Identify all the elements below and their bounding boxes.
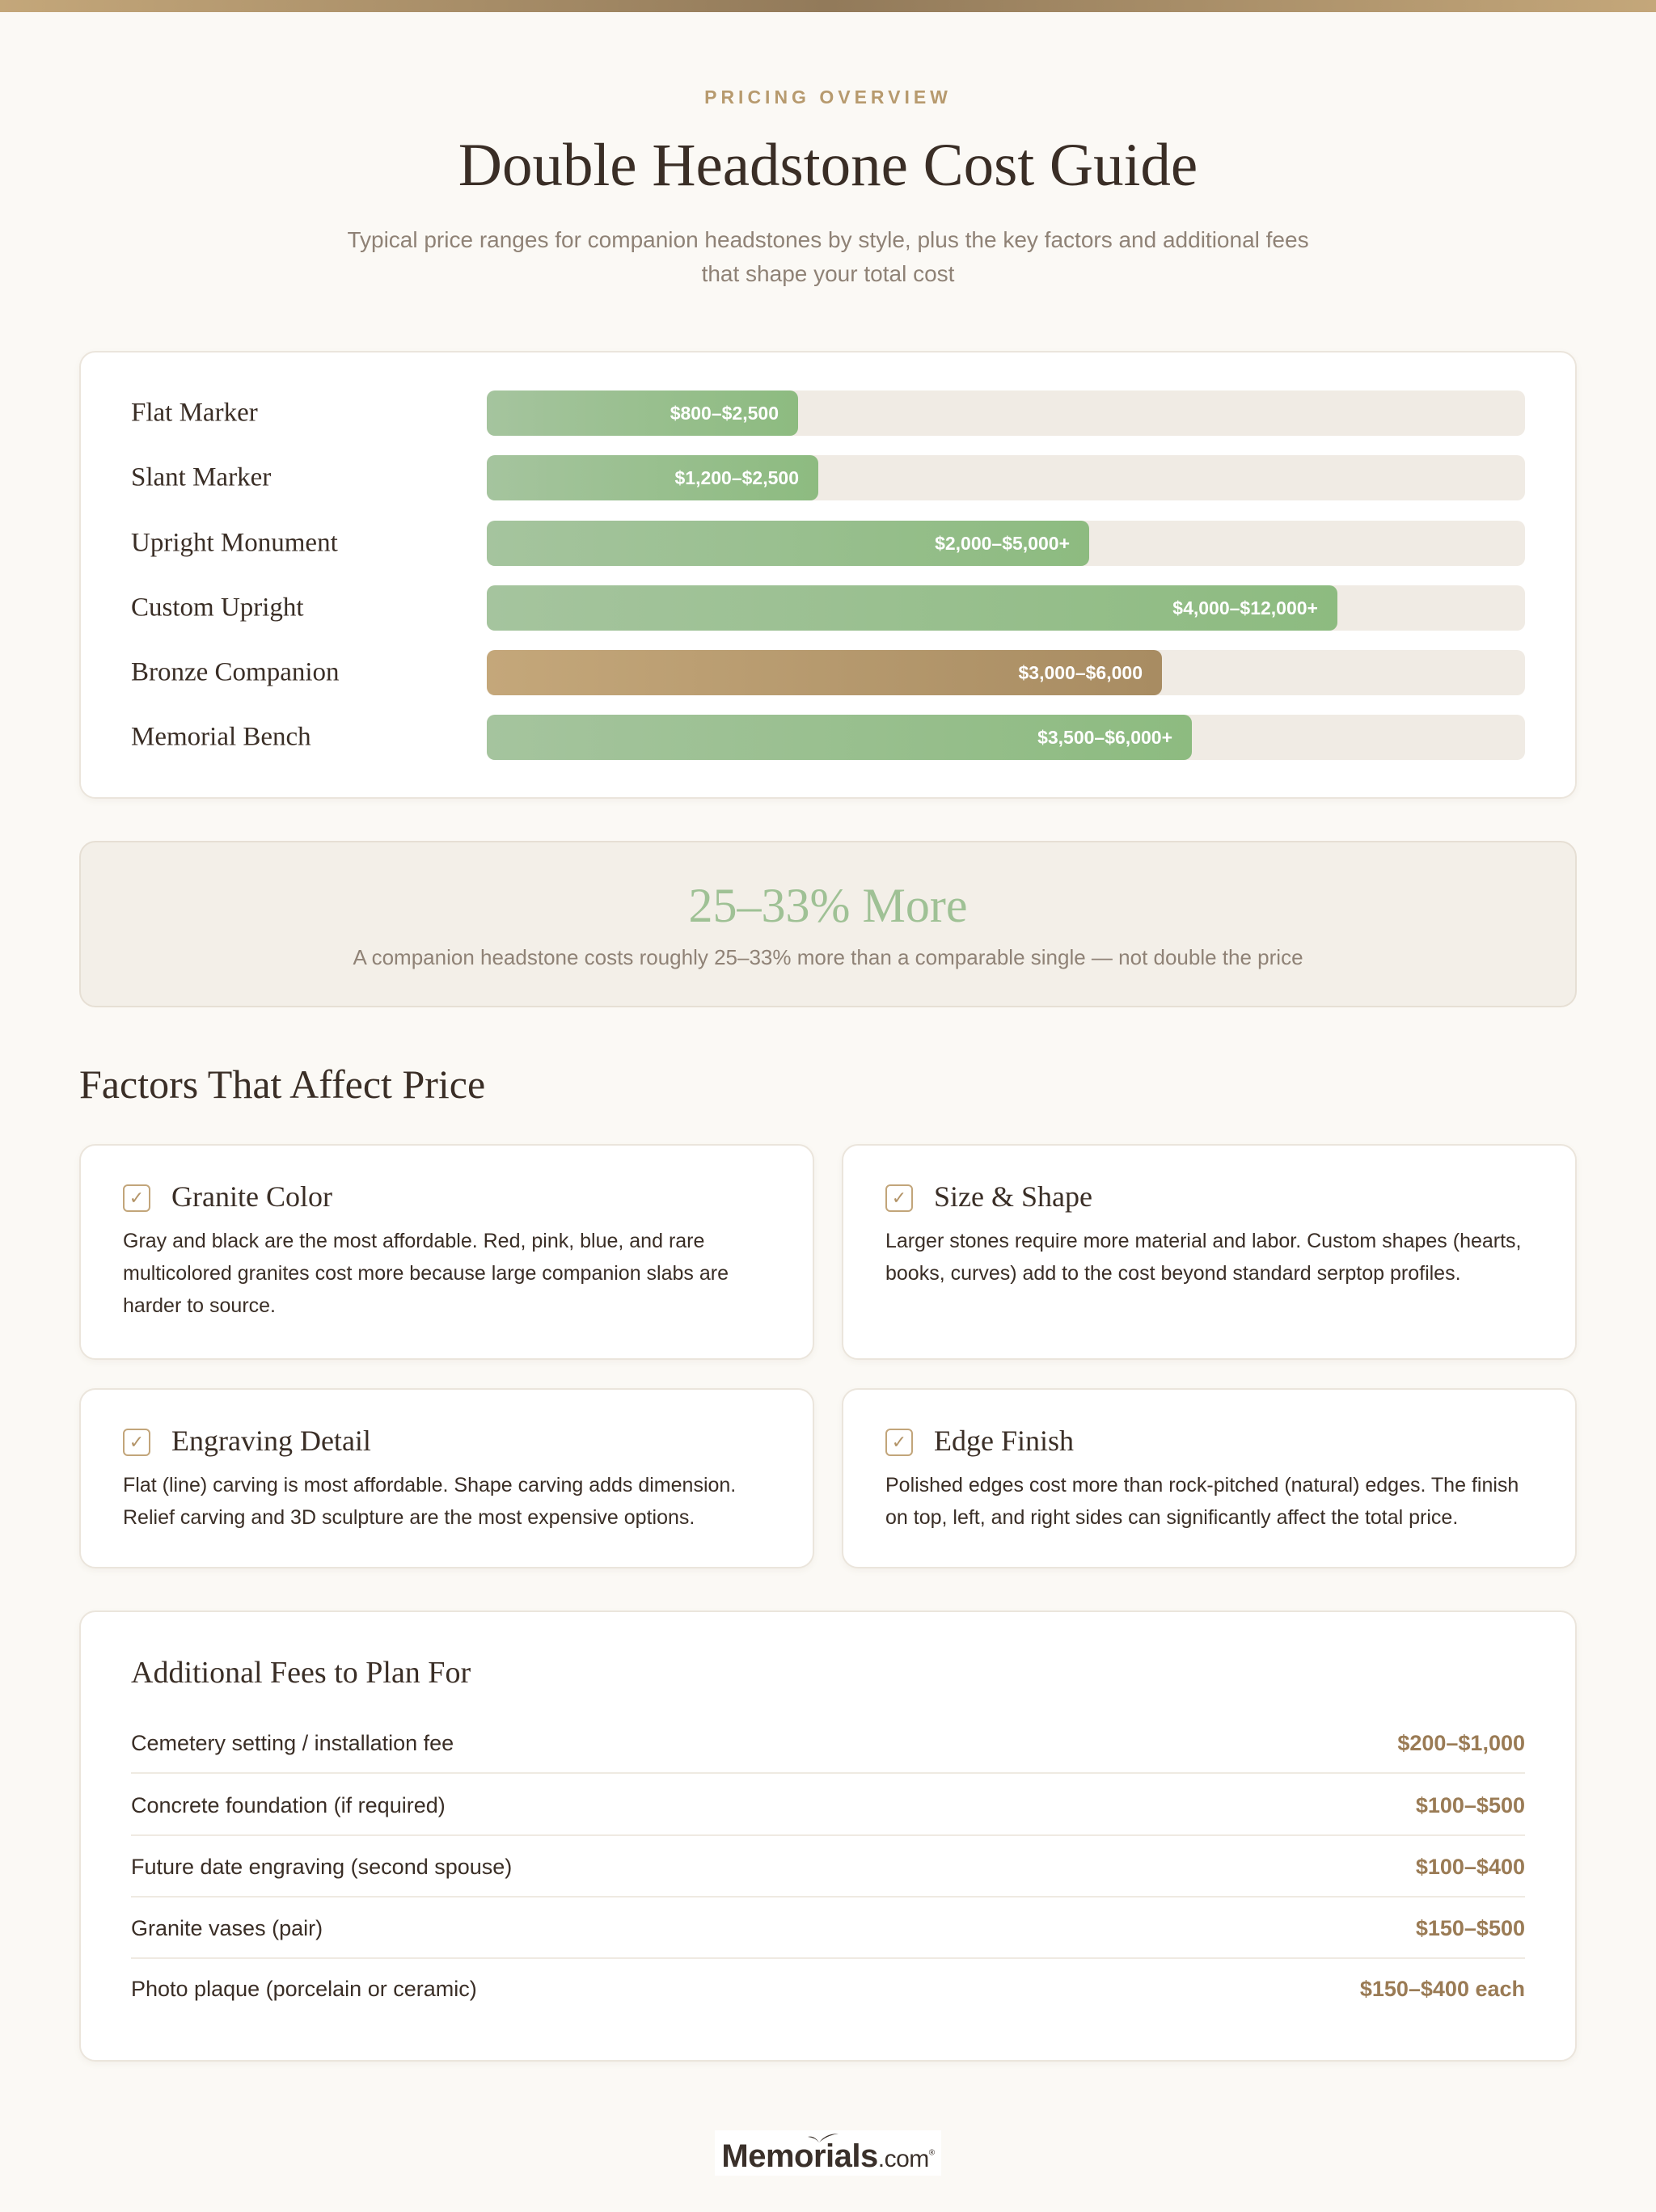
bar chart: Memorial Bench [131,723,311,752]
bar chart: $3,500–$6,000+ [1037,727,1172,748]
card: size & shape: ✓ [892,1188,906,1208]
bar chart: Custom Upright [131,593,304,623]
row: upright monument [131,521,1525,566]
bar chart: $800–$2,500 [670,403,779,424]
fee row: Concrete foundation (if required) [131,1793,446,1817]
card: edge finish [842,1388,1577,1568]
card: granite color: ✓ [129,1188,144,1208]
fee row: Granite vases (pair) [131,1916,323,1940]
subtitle: Typical price ranges for companion headstones by style, plus the key factors and additional fees [347,227,1309,252]
eyebrow: PRICING OVERVIEW [704,87,952,108]
card: granite color [79,1144,814,1360]
bar chart: Flat Marker [131,398,258,427]
fee row [131,1775,1525,1836]
fee row [131,1898,1525,1959]
card: size & shape: Larger stones require more material and labor. Custom shapes (hearts, books, curves) add to the cost beyond standard serptop profiles. [885,1230,1522,1285]
fee row: Cemetery setting / installation fee [131,1731,454,1755]
bar chart: $3,000–$6,000 [1019,662,1143,683]
fee row: Photo plaque (porcelain or ceramic) [131,1977,477,2001]
callout [79,841,1577,1007]
fee row: Future date engraving (second spouse) [131,1855,512,1879]
top gradient bar [0,0,1656,12]
callout text: A companion headstone costs roughly 25–33% more than a comparable single — not double the price [353,945,1303,969]
card: engraving detail [79,1388,814,1568]
callout headline: 25–33% More [689,879,967,932]
icon: bird [808,2134,839,2142]
card: engraving detail: Engraving Detail [171,1425,371,1457]
card: size & shape [842,1144,1577,1360]
fee row [131,1977,1525,2001]
bar chart [131,390,1525,760]
card: edge finish: Polished edges cost more than rock-pitched (natural) edges. The finish on top, left, and right sides can significantly affect the total price. [885,1474,1519,1529]
panel: bar chart [79,351,1577,799]
bar chart: Bronze Companion [131,658,340,687]
fees title: Additional Fees to Plan For [131,1656,471,1690]
fee row: $200–$1,000 [1397,1731,1525,1755]
fee row [131,1712,1525,1774]
bar chart: $4,000–$12,000+ [1172,597,1318,618]
bar chart: $2,000–$5,000+ [935,533,1070,554]
card: edge finish: ✓ [892,1432,906,1452]
subtitle: that shape your total cost [702,261,954,286]
card: engraving detail: ✓ [129,1432,144,1452]
card: granite color: Gray and black are the most affordable. Red, pink, blue, and rare multicolored granites cost more because large companion slabs are harder to source. [123,1230,729,1317]
title: Double Headstone Cost Guide [458,132,1198,199]
panel: additional fees [79,1610,1577,2062]
fee row: $150–$400 each [1360,1977,1525,2001]
bar chart: Slant Marker [131,462,271,492]
row: custom upright [131,585,1525,631]
card: edge finish: Edge Finish [934,1425,1074,1457]
row: flat marker [131,390,1525,436]
row: memorial bench [131,715,1525,760]
card: granite color: Granite Color [171,1180,332,1213]
fee row: $100–$500 [1416,1793,1525,1817]
card: size & shape: Size & Shape [934,1180,1092,1213]
row: bronze companion [131,650,1525,695]
row: slant marker [131,455,1525,500]
fee row: $100–$400 [1416,1855,1525,1879]
bar chart: $1,200–$2,500 [674,467,799,488]
heading: factors: Factors That Affect Price [79,1062,485,1107]
fee row [131,1836,1525,1898]
fee row: $150–$500 [1416,1916,1525,1940]
bar chart: Upright Monument [131,529,338,558]
card: engraving detail: Flat (line) carving is most affordable. Shape carving adds dimension. Relief carving and 3D sculpture are the most expensive options. [123,1474,736,1529]
logo: Memorials.com® [721,2138,935,2174]
subtitle [347,227,1309,286]
